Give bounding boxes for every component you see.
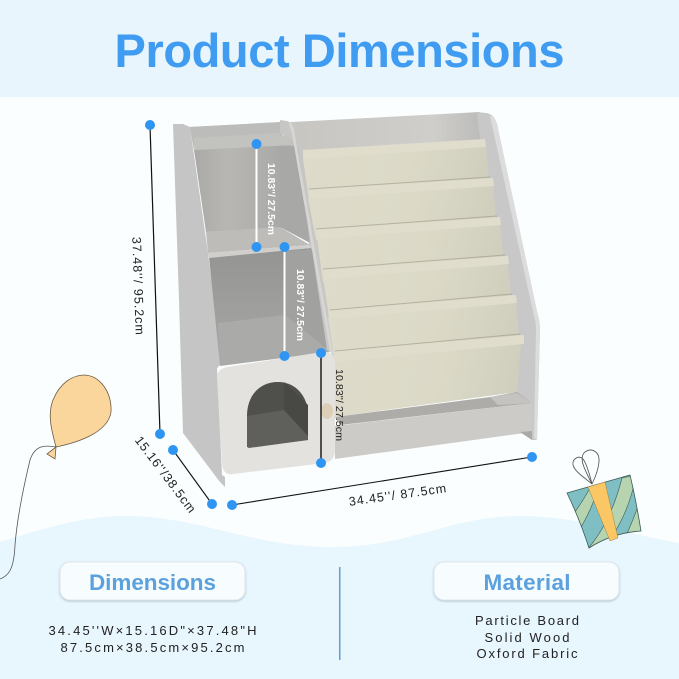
pill: material heading [434,562,619,600]
dimension: upper shelf line [252,139,262,252]
lower compartment floor [218,315,330,366]
text: material list [475,613,579,661]
cat door [217,352,335,474]
label: door height: 10.83''/ 27.5cm [333,369,344,441]
title: Product Dimensions [114,24,564,77]
lower compartment back wall [209,248,327,365]
door knob [321,403,333,419]
dimension: lower shelf line [280,242,290,361]
dimension: width line [227,452,537,510]
right side panel [477,112,540,440]
panel: material [434,562,619,661]
label: height: 37.48''/ 95.2cm [129,237,147,335]
pill: dimensions heading: Dimensions [89,570,216,595]
dimension: depth line [168,445,217,509]
middle shelf [206,227,311,258]
pill: material heading: Material [484,570,570,595]
icon: balloon [0,375,111,579]
text: material list: Solid Wood [484,630,570,645]
text: dimensions imperial: 34.45''W×15.16D"×37.48"H [48,623,256,638]
door arch opening [247,382,308,448]
label: depth: 15.16''/38.5cm [132,434,198,516]
header band [0,0,679,97]
fabric sling rows [303,139,524,417]
label: lower shelf height: 10.83''/ 27.5cm [294,269,305,341]
icon: gift box [566,450,642,549]
text: dimensions metric: 87.5cm×38.5cm×95.2cm [60,640,244,655]
dimension: height line [145,120,165,439]
back panel [280,112,500,370]
pill: dimensions heading [60,562,245,600]
text: material list: Particle Board [475,613,579,628]
bottom tray [335,392,532,459]
lower compartment right wall [285,249,327,348]
left side panel [173,124,225,487]
label: upper shelf height: 10.83''/ 27.5cm [265,163,276,235]
upper compartment right wall [279,145,310,243]
upper compartment back wall [190,122,282,232]
divider [339,567,340,660]
text: material list: Oxford Fabric [476,646,578,661]
dimension: door line [316,348,326,468]
top shelf [193,133,295,150]
panel: dimensions [48,562,256,655]
bookshelf product illustration [173,112,540,487]
centre divider panel [280,120,333,353]
bottom wave background [0,516,679,679]
label: width: 34.45''/ 87.5cm [348,481,447,509]
